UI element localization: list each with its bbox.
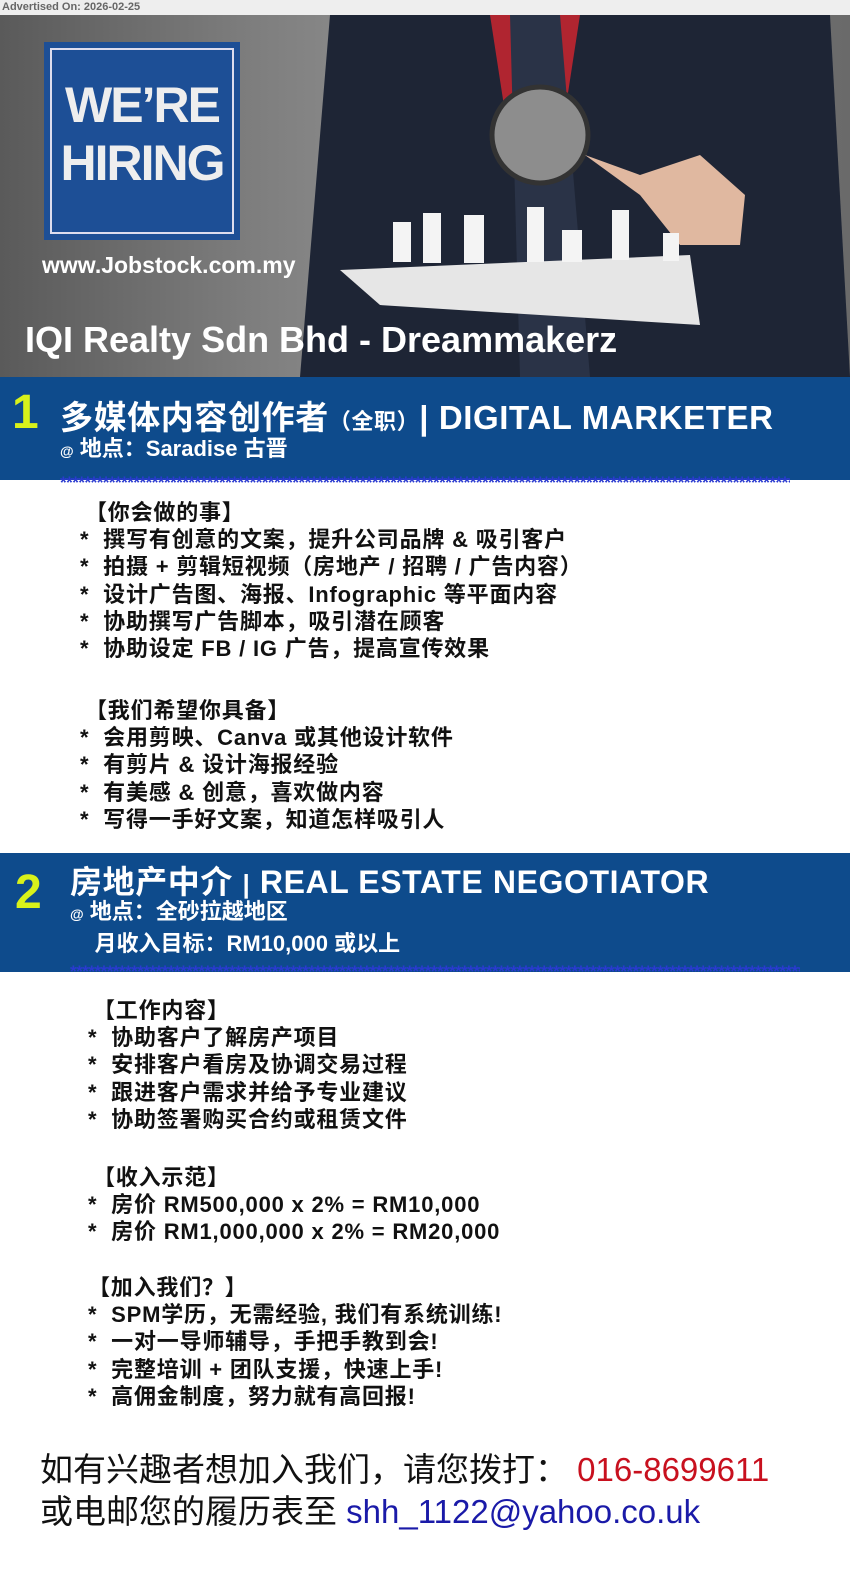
why join: * 完整培训 + 团队支援，快速上手! [88,1357,443,1382]
we're hiring box: HIRING [60,135,224,191]
job 1 requirements: 【我们希望你具备】 [85,698,290,723]
why join: 【加入我们？】 [88,1275,248,1300]
number 2: 2 [15,866,42,919]
location and income: @ 地点：全砂拉越地区 [70,899,288,924]
top bar: Advertised On: 2026-02-25 [2,1,140,13]
job 2 duties: * 安排客户看房及协调交易过程 [88,1052,408,1077]
job 1 duties [80,500,583,661]
job 2 title: 房地产中介 | REAL ESTATE NEGOTIATOR [70,864,709,900]
band: job 2 [0,853,850,972]
job 1 duties: * 拍摄 + 剪辑短视频（房地产 / 招聘 / 广告内容） [80,554,583,579]
hero banner [0,15,850,377]
job 2 duties: * 跟进客户需求并给予专业建议 [88,1080,408,1105]
job 2 duties [88,998,408,1132]
location: @ 地点：Saradise 古晋 [60,436,288,461]
why join: * 一对一导师辅导，手把手教到会! [88,1329,439,1354]
job 2 duties: 【工作内容】 [93,998,230,1023]
job 1 duties: * 设计广告图、海报、Infographic 等平面内容 [80,582,558,607]
income example [88,1165,500,1244]
contact: 或电邮您的履历表至 shh_1122@yahoo.co.uk [40,1493,700,1530]
job 1 title: 多媒体内容创作者（全职）| DIGITAL MARKETER [60,399,774,436]
income example: * 房价 RM1,000,000 x 2% = RM20,000 [88,1219,500,1244]
job 2 duties: * 协助签署购买合约或租赁文件 [88,1107,408,1132]
why join [88,1275,502,1409]
number 1: 1 [12,386,39,439]
we're hiring box [44,42,240,240]
income example: 【收入示范】 [93,1165,230,1190]
job 2 duties: * 协助客户了解房产项目 [88,1025,339,1050]
band: job 1 [0,377,850,480]
we're hiring box: WE’RE [65,77,219,133]
why join: * SPM学历，无需经验, 我们有系统训练! [88,1302,502,1327]
company name: IQI Realty Sdn Bhd - Dreammakerz [25,319,617,360]
job 1 duties: * 撰写有创意的文案，提升公司品牌 & 吸引客户 [80,527,567,552]
contact [40,1451,769,1530]
job 1 duties: * 协助撰写广告脚本，吸引潜在顾客 [80,609,445,634]
location and income: 月收入目标：RM10,000 或以上 [94,931,400,956]
job 1 requirements: * 有美感 & 创意，喜欢做内容 [80,780,384,805]
suit figure [300,15,850,377]
top bar [0,0,850,15]
job 1 requirements: * 会用剪映、Canva 或其他设计软件 [80,725,454,750]
contact: 如有兴趣者想加入我们，请您拨打： 016-8699611 [40,1451,769,1488]
website: www.Jobstock.com.my [42,252,296,278]
job 1 duties: 【你会做的事】 [85,500,245,525]
job 1 requirements [80,698,454,832]
income example: * 房价 RM500,000 x 2% = RM10,000 [88,1192,480,1217]
job 1 requirements: * 有剪片 & 设计海报经验 [80,752,339,777]
location and income [70,899,400,956]
job 1 requirements: * 写得一手好文案，知道怎样吸引人 [80,807,445,832]
job 1 duties: * 协助设定 FB / IG 广告，提高宣传效果 [80,636,490,661]
why join: * 高佣金制度，努力就有高回报! [88,1384,416,1409]
